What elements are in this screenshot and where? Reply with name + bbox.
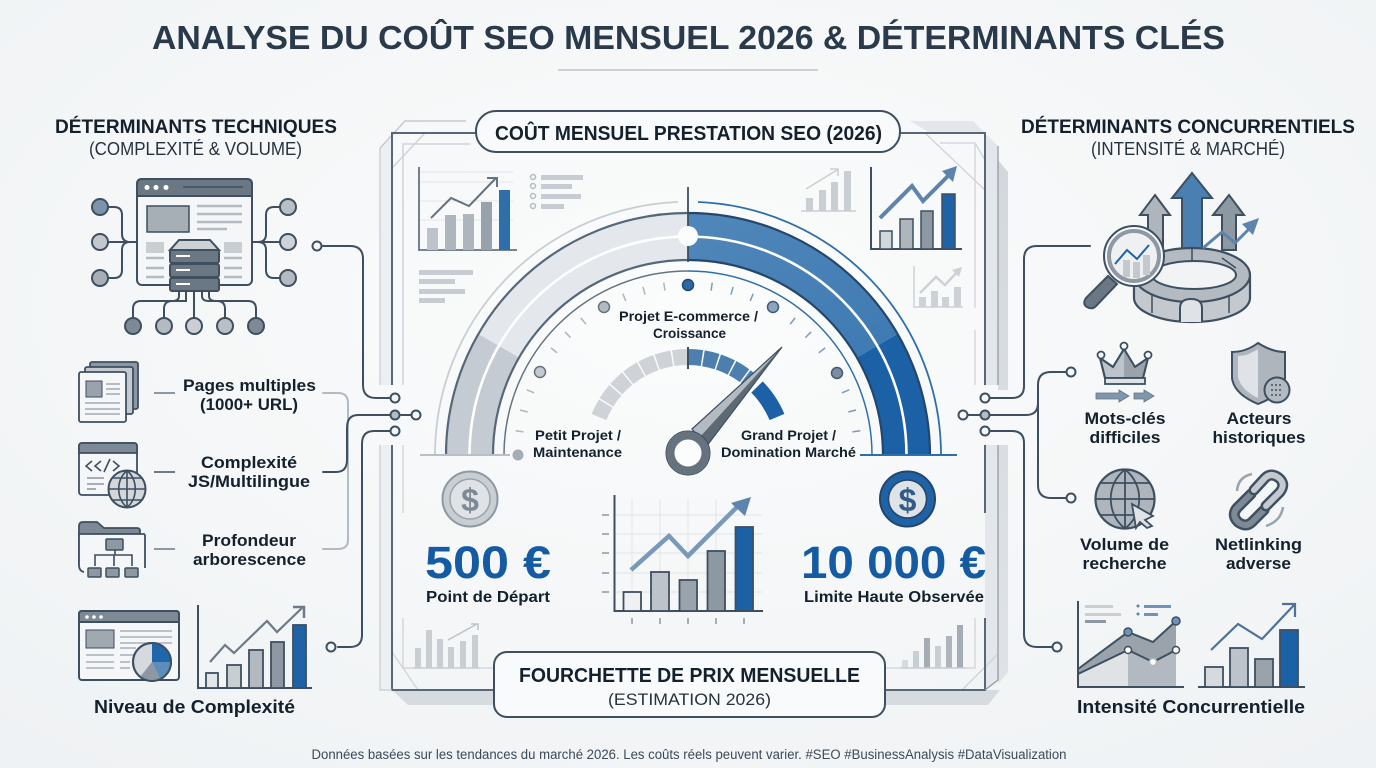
label: volume de recherche: recherche xyxy=(1082,554,1166,573)
mini chart: right light xyxy=(914,266,963,307)
icon: multiple pages xyxy=(79,362,138,422)
icon: shield with badge xyxy=(1232,343,1290,404)
label: profondeur: arborescence xyxy=(193,551,306,569)
chart: competitive area xyxy=(1078,601,1184,687)
label: complexité JS: Complexité xyxy=(201,454,297,472)
icon: arena magnifier arrows xyxy=(1084,173,1259,322)
chart: central bars xyxy=(602,495,763,624)
label: mots-clés difficiles: difficiles xyxy=(1090,428,1160,447)
label: pages multiples xyxy=(183,377,316,414)
label: complexité JS: JS/Multilingue xyxy=(188,473,310,491)
label: niveau de complexité: Niveau de Complexité xyxy=(94,696,295,717)
label: pages multiples: Pages multiples xyxy=(183,377,316,395)
mini chart: top right light xyxy=(801,169,856,211)
gauge labels: Domination Marché xyxy=(721,444,856,460)
label: mots-clés difficiles: Mots-clés xyxy=(1084,409,1166,428)
label: acteurs historiques: historiques xyxy=(1212,428,1306,447)
label: netlinking adverse: adverse xyxy=(1226,554,1291,573)
label: profondeur: Profondeur xyxy=(202,532,297,550)
label: acteurs historiques xyxy=(1212,409,1306,447)
value: top price: 10 000 € xyxy=(801,537,986,588)
heading: technical determinants xyxy=(55,116,337,159)
icon: complexity browser with pie xyxy=(79,611,179,681)
mini chart: top right main xyxy=(871,166,962,249)
value: start price xyxy=(425,537,551,606)
icon: crown with arrows xyxy=(1096,342,1154,402)
heading pill: monthly cost xyxy=(476,111,900,152)
icon: grey coin xyxy=(442,472,498,526)
gauge: ticks and dots xyxy=(512,280,860,460)
value: start price: 500 € xyxy=(425,537,551,588)
label: profondeur xyxy=(193,532,306,569)
heading pill: monthly cost: COÛT MENSUEL PRESTATION SEO (2026) xyxy=(495,121,882,145)
label: intensité concurrentielle: Intensité Concurrentielle xyxy=(1077,696,1305,717)
footer note: Données basées sur les tendances du marché 2026. Les coûts réels peuvent varier. #SEO #BusinessAnalysis #DataVisualization xyxy=(312,747,1066,762)
gauge labels: Grand Projet / xyxy=(741,427,836,443)
panel: central frame xyxy=(380,121,1008,705)
right connectors xyxy=(958,246,1090,652)
icon: grey coin: $ xyxy=(461,482,479,518)
heading: competitive determinants: (INTENSITÉ & MARCHÉ) xyxy=(1091,139,1285,159)
gauge labels: Projet E-commerce / xyxy=(619,308,758,324)
left connectors xyxy=(312,242,420,652)
value: start price: Point de Départ xyxy=(426,589,551,606)
value: top price xyxy=(801,537,986,606)
label: volume de recherche xyxy=(1080,535,1169,573)
gauge labels: Petit Projet / xyxy=(535,427,621,443)
heading pill: price range: (ESTIMATION 2026) xyxy=(608,690,771,709)
gauge labels: Maintenance xyxy=(533,444,622,460)
icon: chain link xyxy=(1234,474,1283,526)
icon: code and globe xyxy=(79,443,146,508)
label: netlinking adverse: Netlinking xyxy=(1215,535,1302,554)
heading: technical determinants: DÉTERMINANTS TECHNIQUES xyxy=(55,116,337,138)
label: mots-clés difficiles xyxy=(1084,409,1166,447)
icon: folder tree xyxy=(79,522,145,577)
icon: website server network xyxy=(92,179,296,334)
heading: technical determinants: (COMPLEXITÉ & VOLUME) xyxy=(89,139,302,159)
label: acteurs historiques: Acteurs xyxy=(1226,409,1292,428)
value: top price: Limite Haute Observée xyxy=(804,589,984,606)
heading: competitive determinants xyxy=(1021,116,1355,159)
icon: blue coin xyxy=(880,472,935,526)
mini chart: bottom right light xyxy=(900,625,966,668)
mini chart: bottom left light xyxy=(413,624,480,668)
heading: competitive determinants: DÉTERMINANTS CONCURRENTIELS xyxy=(1021,116,1355,138)
title: ANALYSE DU COÛT SEO MENSUEL 2026 & DÉTERMINANTS CLÉS xyxy=(152,18,1225,56)
mini chart: top left xyxy=(419,167,517,250)
icon: globe with cursor xyxy=(1096,470,1154,528)
heading pill: price range: FOURCHETTE DE PRIX MENSUELLE xyxy=(519,665,860,687)
chart: competitive bars xyxy=(1198,604,1305,687)
chart: complexity bars xyxy=(198,605,312,688)
label: pages multiples: (1000+ URL) xyxy=(200,396,298,414)
heading pill: price range xyxy=(494,652,885,717)
icon: blue coin: $ xyxy=(899,482,917,518)
gauge labels xyxy=(533,308,856,460)
gauge: needle xyxy=(666,347,782,475)
gauge: inner segmented arc xyxy=(599,347,777,417)
label: complexité JS xyxy=(188,454,310,491)
label: volume de recherche: Volume de xyxy=(1080,535,1169,554)
label: netlinking adverse xyxy=(1215,535,1302,573)
gauge: outer arc band xyxy=(420,187,957,455)
gauge labels: Croissance xyxy=(653,325,726,341)
decorative legend lists xyxy=(419,174,583,303)
